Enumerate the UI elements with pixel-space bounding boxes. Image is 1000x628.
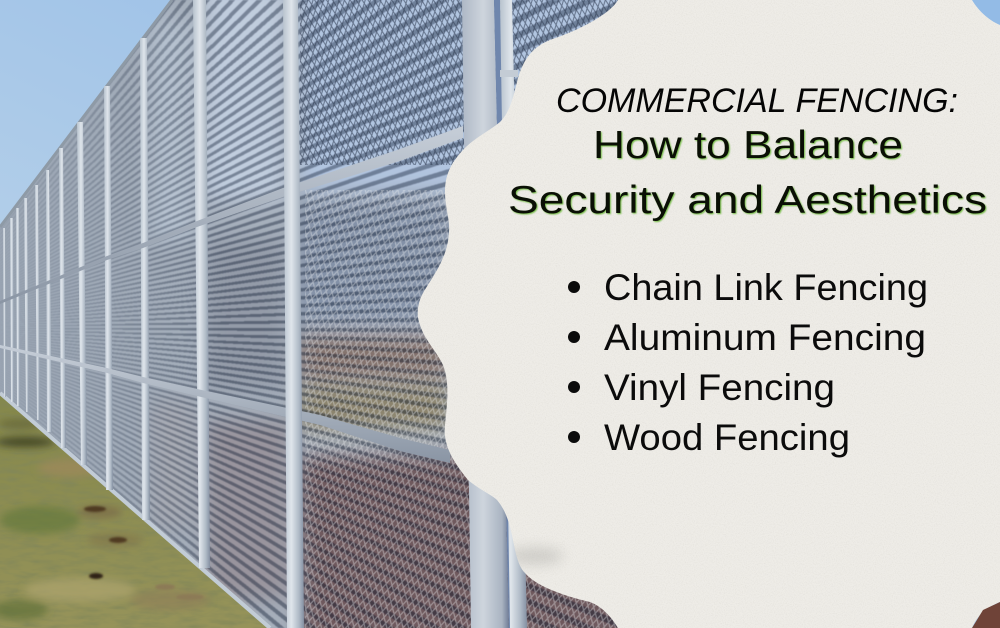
- fence top rail: [0, 0, 172, 227]
- list item: chain link: Chain Link Fencing: [604, 267, 928, 308]
- large foreground post: [462, 0, 509, 628]
- list item: wood: Wood Fencing: [604, 417, 850, 458]
- pipe clamp: [500, 70, 518, 77]
- paper panel shape: [418, 0, 1000, 628]
- wavy paper panel with text: [418, 0, 1000, 628]
- fence bottom rail: [0, 393, 270, 628]
- mesh weave upper: [300, 0, 640, 165]
- near post: [283, 0, 304, 628]
- list item: vinyl: Vinyl Fencing: [604, 367, 835, 408]
- lower horizontal rail: [0, 345, 450, 463]
- fencing type list: [568, 267, 928, 458]
- mesh weave lower: [305, 190, 645, 628]
- chain link mesh colour regions: [0, 0, 640, 628]
- second foreground pipe: [500, 0, 527, 628]
- fallen leaves: [84, 506, 204, 600]
- upper horizontal rail: [0, 126, 463, 304]
- mesh wire stripes in perspective: [26, 0, 618, 628]
- heading line 1: How to Balance: [593, 124, 903, 167]
- list item: aluminum: Aluminum Fencing: [604, 317, 926, 358]
- subtitle: COMMERCIAL FENCING:: [556, 82, 958, 120]
- heading line 2: Security and Aesthetics: [508, 179, 987, 222]
- grass: [0, 390, 280, 628]
- title block: [508, 82, 987, 222]
- far posts: [3, 0, 210, 568]
- gap behind foreground post: [494, 0, 514, 628]
